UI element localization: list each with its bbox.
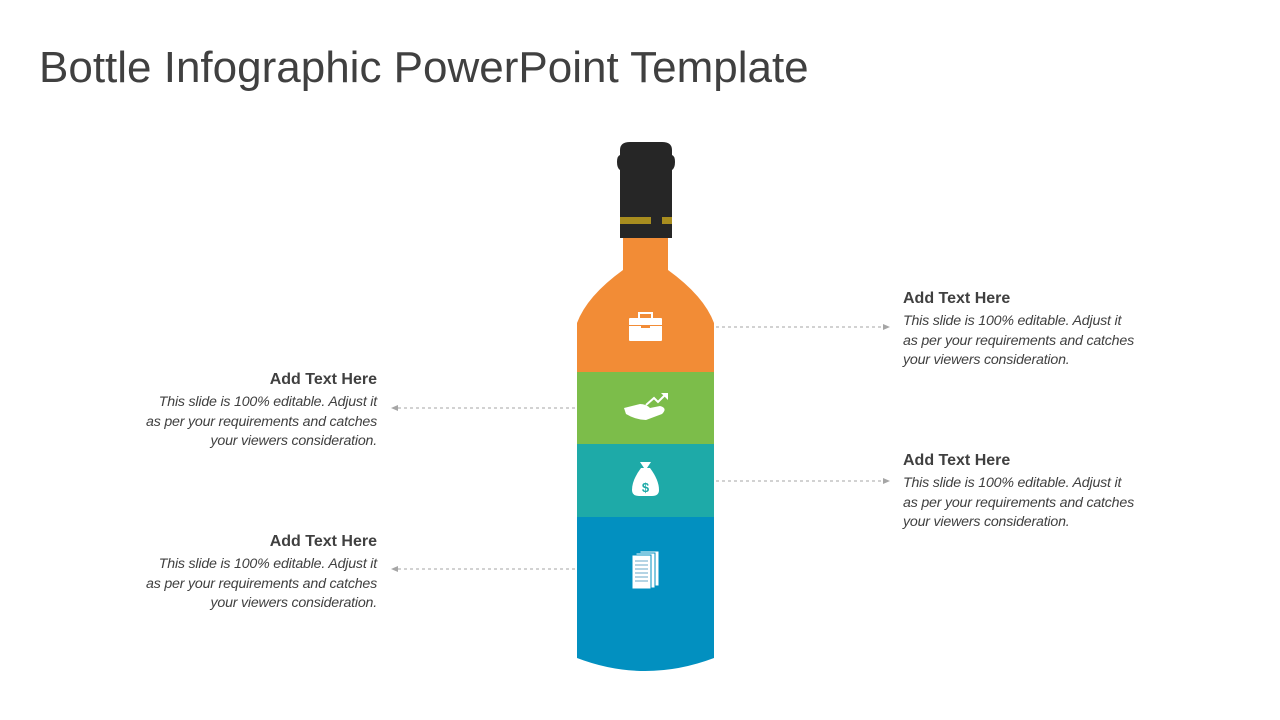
text: Add Text Here xyxy=(903,452,1010,469)
icon: money bag: $ xyxy=(642,480,650,495)
bottle body xyxy=(577,236,714,671)
text block left 1 xyxy=(146,371,378,449)
text: as per your requirements and catches xyxy=(146,576,377,592)
text: Add Text Here xyxy=(270,533,377,550)
text block right 1 xyxy=(902,290,1134,368)
text: your viewers consideration. xyxy=(903,514,1070,530)
text: This slide is 100% editable. Adjust it xyxy=(159,394,377,410)
text: as per your requirements and catches xyxy=(903,332,1134,348)
text: your viewers consideration. xyxy=(903,352,1070,368)
text: Add Text Here xyxy=(903,290,1010,307)
text block right 2 xyxy=(902,452,1134,530)
text: This slide is 100% editable. Adjust it xyxy=(159,556,377,572)
text block left 2 xyxy=(146,533,378,611)
icon: documents xyxy=(632,551,659,589)
arrows xyxy=(397,327,884,569)
text: Add Text Here xyxy=(270,371,377,388)
text: your viewers consideration. xyxy=(210,433,377,449)
text: as per your requirements and catches xyxy=(903,494,1134,510)
text: This slide is 100% editable. Adjust it xyxy=(903,313,1121,329)
bottle cap xyxy=(617,142,675,238)
text: as per your requirements and catches xyxy=(146,414,377,430)
text: your viewers consideration. xyxy=(210,595,377,611)
text: This slide is 100% editable. Adjust it xyxy=(903,475,1121,491)
title: Bottle Infographic PowerPoint Template xyxy=(39,43,809,92)
icon: money bag xyxy=(632,462,659,496)
icon: briefcase xyxy=(629,313,662,341)
icon: hand growth xyxy=(624,393,668,420)
